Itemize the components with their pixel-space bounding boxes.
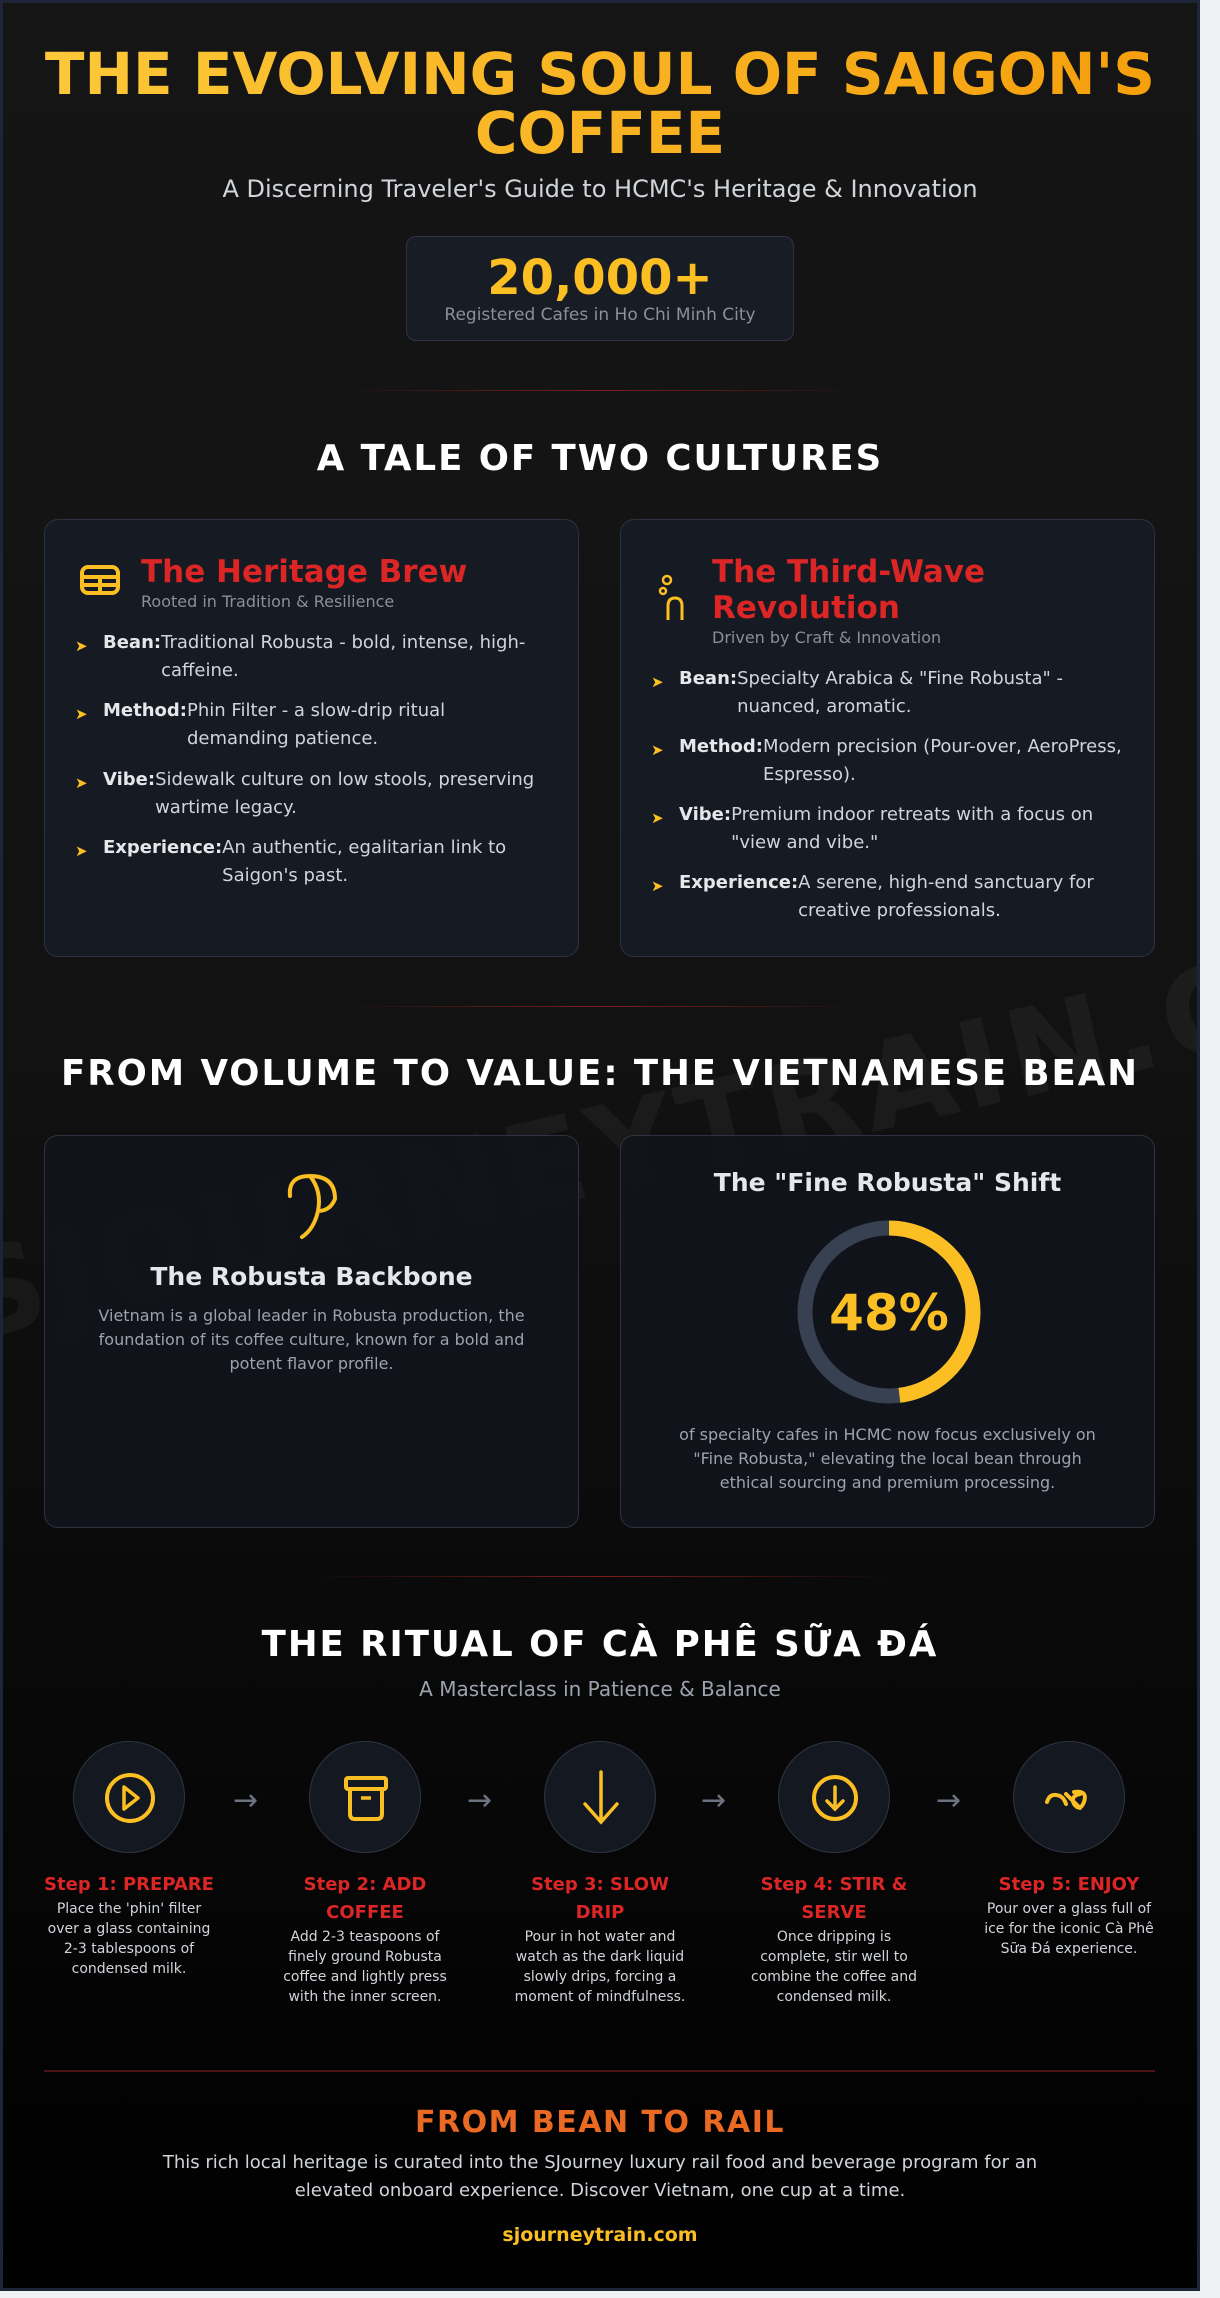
bullet list: Bean: [679,668,737,689]
arrow: → [701,1783,726,1818]
step 5 text: ice for the iconic Cà Phê [984,1921,1154,1937]
heading: ritual: THE RITUAL OF CÀ PHÊ SỮA ĐÁ [262,1624,938,1665]
stat box: 20,000+ [487,250,713,306]
step 2 text: COFFEE [326,1902,404,1923]
step 1 text: condensed milk. [72,1961,186,1977]
panel: heritage brew: The Heritage Brew [141,554,467,590]
panel: heritage brew: Rooted in Tradition & Resilience [141,592,394,611]
step 5 text [984,1874,1154,1957]
icon: filter [80,565,120,595]
panel: heritage brew: Phin Filter - a slow-drip ritual demanding patience. [187,700,445,749]
panel: heritage brew: Sidewalk culture on low stools, preserving wartime legacy. [155,769,534,818]
step 1 text [44,1874,214,1977]
stat box: Registered Cafes in Ho Chi Minh City [444,305,756,325]
step 2 text: with the inner screen. [288,1989,442,2005]
subtitle: ritual: A Masterclass in Patience & Balance [419,1677,781,1701]
icon: step 2 jar [309,1741,421,1853]
step 5 text: Pour over a glass full of [987,1901,1151,1917]
title: THE EVOLVING SOUL OF SAIGON'S [45,40,1155,108]
step 3 text: slowly drips, forcing a [524,1969,676,1985]
bullet list: ➤ [75,637,88,655]
arrow: → [936,1783,961,1818]
step 3 text: moment of mindfulness. [515,1989,685,2005]
panel: third-wave: The Third-Wave [712,554,985,590]
step 1 text: over a glass containing [48,1921,210,1937]
bullet list: Traditional Robusta - bold, intense, high-caffeine. [161,632,525,681]
step 4 text: Step 4: STIR & [761,1874,907,1895]
step 4 text: condensed milk. [777,1989,891,2005]
step 2 text: finely ground Robusta [288,1949,442,1965]
link: sjourneytrain.com [502,2224,698,2246]
icon: step 3 arrow down [544,1741,656,1853]
panel: heritage brew [44,519,579,957]
heading: bean to rail: FROM BEAN TO RAIL [415,2105,785,2140]
step 1 text: 2-3 tablespoons of [64,1941,194,1957]
heading: tale of two cultures: A TALE OF TWO CULTURES [317,438,883,479]
panel: fine robusta shift [620,1135,1155,1528]
subtitle: A Discerning Traveler's Guide to HCMC's Heritage & Innovation [222,175,978,203]
panel: third-wave: Premium indoor retreats with a focus on "view and vibe." [731,804,1093,853]
panel: third-wave: Vibe: [679,804,731,825]
step 1 text: Step 1: PREPARE [44,1874,214,1895]
step 2 text: Step 2: ADD [304,1874,426,1895]
panel: fine robusta shift: The "Fine Robusta" Shift [714,1168,1061,1197]
step 4 text [751,1874,917,2005]
panel: heritage brew: ➤ [75,842,88,860]
panel: heritage brew: ➤ [75,774,88,792]
panel: robusta backbone: Vietnam is a global leader in Robusta production, the foundation of its coffee culture, known for a bold and potent flavor profile. [98,1306,525,1373]
title: COFFEE [475,99,725,167]
panel: heritage brew: Method: [103,700,187,721]
step 4 text: Once dripping is [777,1929,891,1945]
panel: third-wave: A serene, high-end sanctuary for creative professionals. [798,872,1094,921]
step 4 text: complete, stir well to [760,1949,908,1965]
step 4 text: combine the coffee and [751,1969,917,1985]
step 2 text: Add 2-3 teaspoons of [290,1929,439,1945]
icon: step 5 enjoy [1013,1741,1125,1853]
panel: third-wave: ➤ [651,809,664,827]
icon: step 1 play [73,1741,185,1853]
icon: step 4 circle arrow [778,1741,890,1853]
step 3 text: DRIP [576,1902,624,1923]
title [3,45,1197,163]
bullet list: ➤ [651,673,664,691]
panel: third-wave: Modern precision (Pour-over, AeroPress, Espresso). [763,736,1122,785]
panel: heritage brew: Vibe: [103,769,155,790]
arrow: → [467,1783,492,1818]
panel: third-wave: ➤ [651,741,664,759]
step 5 text: Sữa Đá experience. [1001,1941,1137,1957]
icon: person [658,574,684,620]
panel: robusta backbone [44,1135,579,1528]
step 3 text [515,1874,685,2005]
step 5 text: Step 5: ENJOY [999,1874,1139,1895]
donut chart 48% [798,1220,980,1404]
icon: bean [288,1174,337,1240]
panel: third-wave [620,519,1155,957]
panel: third-wave: ➤ [651,877,664,895]
step 3 text: Pour in hot water and [525,1929,675,1945]
panel: third-wave: Experience: [679,872,798,893]
stat box [406,236,794,341]
panel: robusta backbone: The Robusta Backbone [150,1262,473,1291]
arrow: → [233,1783,258,1818]
step 3 text: watch as the dark liquid [516,1949,684,1965]
step 2 text [283,1874,447,2005]
bullet list: Bean: [103,632,161,653]
panel: heritage brew: An authentic, egalitarian link to Saigon's past. [222,837,506,886]
step 3 text: Step 3: SLOW [531,1874,669,1895]
step 2 text: coffee and lightly press [283,1969,447,1985]
donut chart 48%: 48% [829,1284,949,1342]
step 1 text: Place the 'phin' filter [57,1901,201,1917]
panel: third-wave: Driven by Craft & Innovation [712,628,941,647]
panel: third-wave: Method: [679,736,763,757]
bullet list: Specialty Arabica & "Fine Robusta" - nuanced, aromatic. [737,668,1063,717]
heading: volume to value: FROM VOLUME TO VALUE: THE VIETNAMESE BEAN [61,1053,1139,1094]
step 4 text: SERVE [801,1902,867,1923]
panel: heritage brew: ➤ [75,705,88,723]
closing paragraph: This rich local heritage is curated into the SJourney luxury rail food and beverage program for an elevated onboard experience. Discover Vietnam, one cup at a time. [163,2152,1037,2201]
panel: fine robusta shift: of specialty cafes in HCMC now focus exclusively on "Fine Robusta," elevating the local bean through ethical sourcing and premium processing. [679,1425,1096,1492]
panel: third-wave: Revolution [712,590,900,626]
panel: heritage brew: Experience: [103,837,222,858]
